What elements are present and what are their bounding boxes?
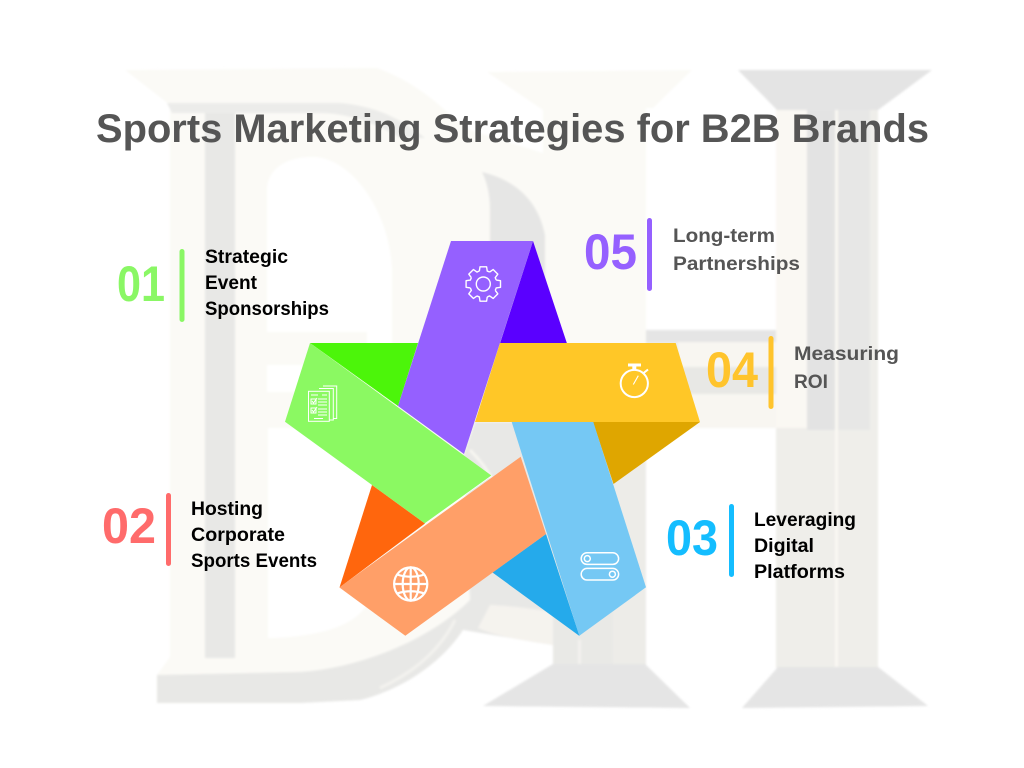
- D tail shadow and centre shade: [157, 422, 553, 703]
- item 02: Hosting Corporate Sports Events: 02: [102, 498, 156, 554]
- icon: checklist documents: [308, 386, 337, 421]
- item 03: Leveraging Digital Platforms: [666, 504, 856, 583]
- H left column lower: [553, 425, 646, 665]
- D counter lower: [268, 428, 380, 638]
- item 05: Long-term Partnerships: 05: [584, 224, 637, 280]
- item 02: Hosting Corporate Sports Events: Hosting: [191, 498, 263, 520]
- white gap under D tail: [400, 630, 550, 715]
- item 01: Strategic Event Sponsorships: Event: [205, 272, 257, 294]
- band: purple: [398, 241, 533, 454]
- fold: dark green: [310, 343, 418, 406]
- H left base: [483, 664, 690, 708]
- item 03: Leveraging Digital Platforms: Platforms: [754, 561, 845, 583]
- H right column: [776, 108, 878, 668]
- icon: stopwatch: [621, 364, 648, 397]
- item 05: Long-term Partnerships: Long-term: [673, 225, 775, 247]
- icon: globe: [394, 567, 428, 601]
- item 03: Leveraging Digital Platforms: 03: [666, 510, 718, 566]
- item 04: Measuring ROI: 04: [706, 342, 758, 398]
- band: orange: [339, 457, 546, 636]
- item 04: Measuring ROI: [706, 336, 899, 409]
- item 01: Strategic Event Sponsorships: 01: [117, 256, 165, 312]
- D and H left column cream body: [125, 68, 692, 703]
- band: green: [285, 343, 492, 524]
- D counter slot: [267, 365, 337, 392]
- D tail highlight curve: [478, 605, 553, 645]
- item 01: Strategic Event Sponsorships: [117, 246, 329, 322]
- D top shadow: [167, 103, 425, 138]
- D counter upper: [267, 157, 392, 345]
- item 05: Long-term Partnerships: [584, 218, 800, 291]
- fold: dark yellow: [593, 422, 700, 484]
- background watermark: DH monogram: [125, 68, 932, 715]
- item 01: Strategic Event Sponsorships: Strategic: [205, 246, 288, 268]
- item 02: Hosting Corporate Sports Events: [102, 493, 317, 572]
- band: yellow: [475, 343, 700, 422]
- D stem shadow: [205, 113, 235, 658]
- fold: dark orange: [340, 485, 425, 588]
- item 01: Strategic Event Sponsorships: Sponsorships: [205, 298, 329, 320]
- item 03: Leveraging Digital Platforms: Digital: [754, 535, 814, 557]
- H crossbar: [646, 340, 778, 428]
- title: Sports Marketing Strategies for B2B Brands: [96, 107, 929, 151]
- star diagram: [285, 241, 700, 636]
- item 05: Long-term Partnerships: Partnerships: [673, 253, 800, 275]
- fold: dark blue: [492, 534, 580, 636]
- D bowl shadow: [482, 172, 545, 345]
- item 04: Measuring ROI: Measuring: [794, 343, 899, 365]
- item 02: Hosting Corporate Sports Events: Corporate: [191, 524, 285, 546]
- icon: gear: [466, 267, 500, 301]
- H right base: [742, 667, 928, 708]
- H right top serif: [738, 70, 932, 110]
- icon: toggles: [581, 553, 619, 580]
- item 04: Measuring ROI: ROI: [794, 371, 828, 393]
- item 03: Leveraging Digital Platforms: Leveraging: [754, 509, 856, 531]
- fold: dark purple: [500, 241, 567, 344]
- band: blue: [512, 422, 646, 636]
- item 02: Hosting Corporate Sports Events: Sports Events: [191, 550, 317, 572]
